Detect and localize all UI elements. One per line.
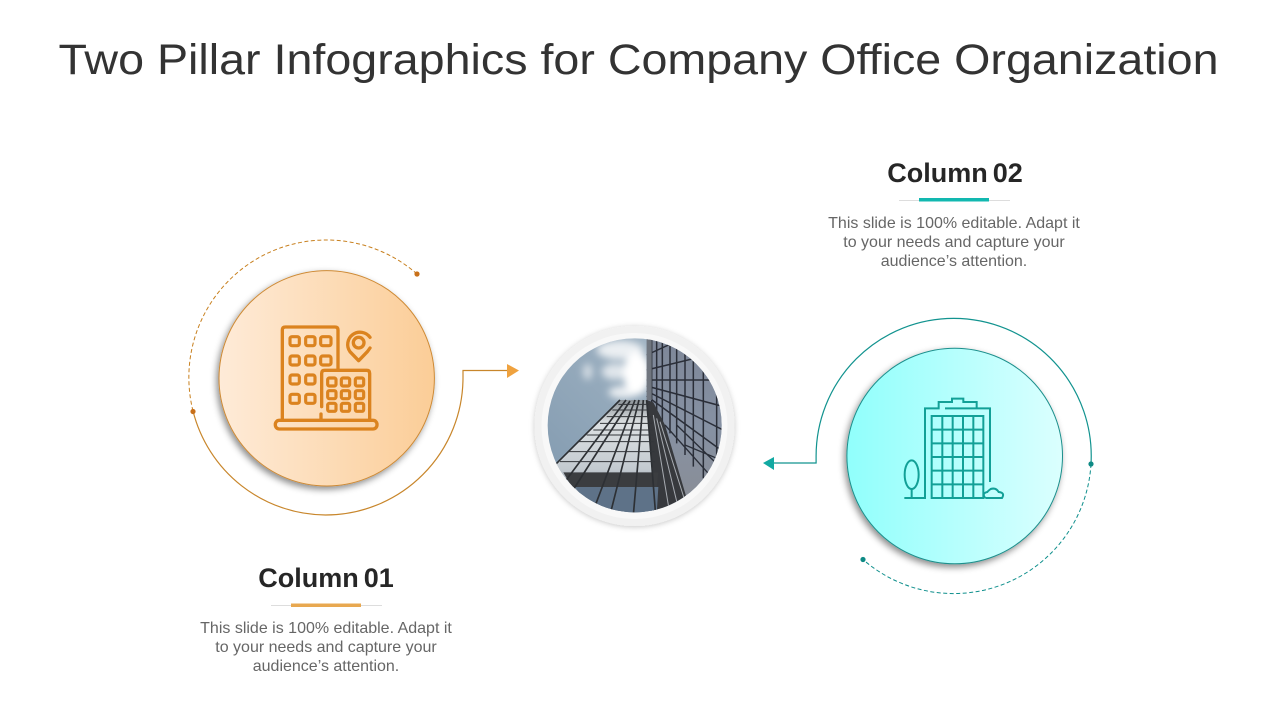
body: column 01: This slide is 100% editable. Adapt it	[200, 620, 452, 637]
divider: column 01	[271, 604, 382, 607]
panel: column 01 circle graphic	[189, 240, 519, 515]
photo frame	[534, 326, 734, 526]
ring dots: left	[190, 271, 420, 414]
body: column 01: audience’s attention.	[253, 658, 399, 675]
heading: column 02: Column 02	[887, 158, 1023, 188]
divider: column 02	[899, 198, 1010, 202]
title: Two Pillar Infographics for Company Office Organization	[58, 36, 1218, 84]
panel: centre building photo	[534, 319, 734, 526]
arrow: right ring to centre photo	[763, 318, 1091, 470]
body: column 02: to your needs and capture your	[843, 234, 1065, 251]
text block: column 02	[828, 158, 1080, 270]
teal circle	[847, 348, 1062, 564]
orange circle	[219, 271, 434, 486]
icon: office buildings with location pin	[275, 327, 377, 429]
body: column 02: This slide is 100% editable. Adapt it	[828, 215, 1080, 232]
body: column 02: audience’s attention.	[881, 253, 1027, 270]
icon: office tower with tree and bush	[904, 399, 1003, 498]
heading: column 01: Column 01	[258, 563, 394, 593]
dashed ring arc: right	[863, 464, 1091, 594]
photo: skyscraper seen from below	[548, 338, 722, 512]
body: column 01: to your needs and capture your	[215, 639, 437, 656]
text block: column 01	[200, 563, 452, 675]
dashed ring arc: left	[189, 240, 417, 411]
ring dots: right	[860, 461, 1094, 562]
arrow: left ring to centre photo	[193, 364, 519, 515]
panel: column 02 circle graphic	[763, 318, 1094, 594]
